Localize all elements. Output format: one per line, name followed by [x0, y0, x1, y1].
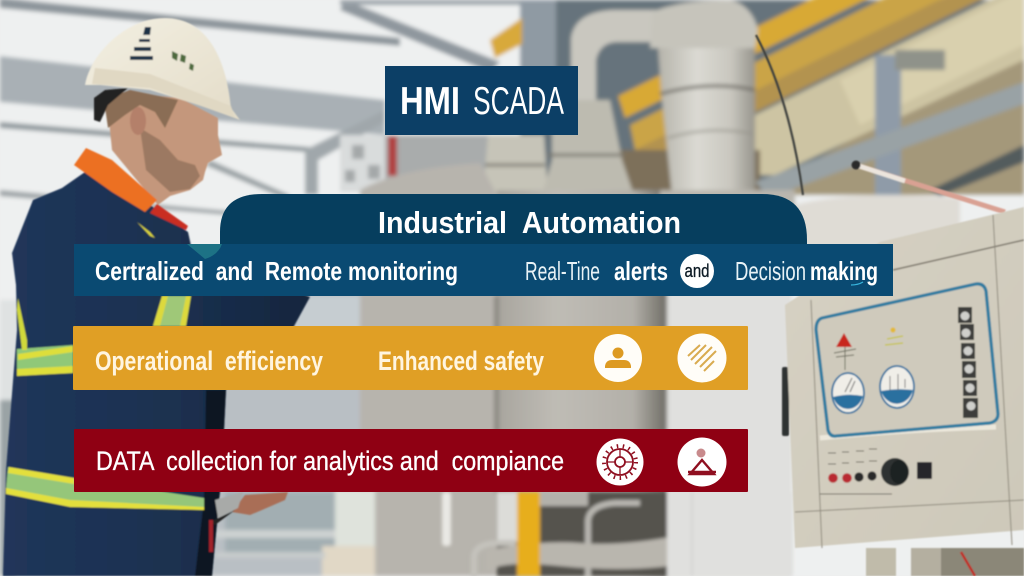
panel: indicator buttons — [958, 307, 978, 418]
bar text: alerts: alerts — [614, 256, 668, 286]
worker: stubble — [140, 128, 200, 192]
bar text: making: making — [810, 256, 878, 286]
worker: hand and device — [232, 492, 288, 515]
icon: gear network — [596, 438, 644, 486]
control panel — [782, 207, 1024, 576]
background: small flanged vessels — [483, 100, 634, 195]
and badge: and — [684, 261, 710, 281]
red bar — [74, 429, 748, 492]
bar text: centralized monitoring: Certralized and Remote monitoring — [95, 256, 458, 286]
collar tint — [187, 244, 222, 259]
panel: red triangle symbol — [834, 333, 856, 370]
bar text: real-time: Real-Tine — [525, 256, 600, 286]
panel: gauge left — [832, 373, 864, 413]
title tab — [220, 194, 807, 246]
panel: gauge right — [880, 366, 914, 408]
badge text: HMI: HMI — [400, 80, 460, 123]
worker: collar — [74, 148, 157, 212]
worker: chest reflective strip — [153, 296, 191, 326]
bar text: operational efficiency: Operational efficiency — [95, 346, 323, 376]
background: windows behind worker — [0, 290, 375, 576]
panel: selector switch — [917, 462, 932, 479]
worker: jacket — [3, 172, 310, 576]
worker: waist reflective strip — [6, 467, 204, 510]
panel: push buttons — [828, 471, 877, 483]
icon: tools — [678, 334, 726, 382]
icon: person — [594, 334, 642, 382]
bar text: data collection: DATA collection for analytics and compiance — [96, 446, 564, 476]
bar text: decision: Decision — [735, 256, 806, 286]
panel: cabinet — [785, 207, 1024, 548]
yellow bar — [73, 326, 748, 390]
panel: yellow symbol — [885, 327, 903, 345]
helmet: logo — [172, 51, 194, 71]
badge text: SCADA: SCADA — [473, 80, 564, 123]
background: large tanks — [360, 163, 960, 576]
HMI SCADA badge — [385, 66, 578, 135]
helmet: vent marks — [130, 27, 153, 60]
background: cyclone vessel and pipe — [571, 0, 758, 195]
panel: blue screen frame — [816, 284, 998, 436]
worker: neck and face — [108, 92, 222, 205]
worker: sleeve reflective strip — [17, 345, 73, 375]
cable — [756, 35, 803, 195]
panel: side handle — [782, 367, 789, 436]
background: steel roof beams — [0, 0, 520, 216]
worker: ear — [130, 107, 146, 135]
worker: hair — [104, 90, 178, 128]
panel: support legs — [866, 548, 1024, 576]
title text: Industrial Automation — [378, 205, 681, 240]
panel: rotary knob — [881, 458, 909, 486]
pink rod — [852, 160, 1005, 212]
blue bar — [74, 244, 893, 296]
bar text: enhanced safety: Enhanced safety — [378, 346, 544, 376]
worker: helmet — [85, 18, 240, 120]
background: lower pipework — [442, 492, 792, 576]
panel: small labels — [820, 449, 892, 494]
background: upper structure — [340, 0, 1024, 197]
worker — [3, 18, 310, 576]
and badge — [680, 254, 714, 288]
icon: warning triangle — [678, 438, 726, 486]
